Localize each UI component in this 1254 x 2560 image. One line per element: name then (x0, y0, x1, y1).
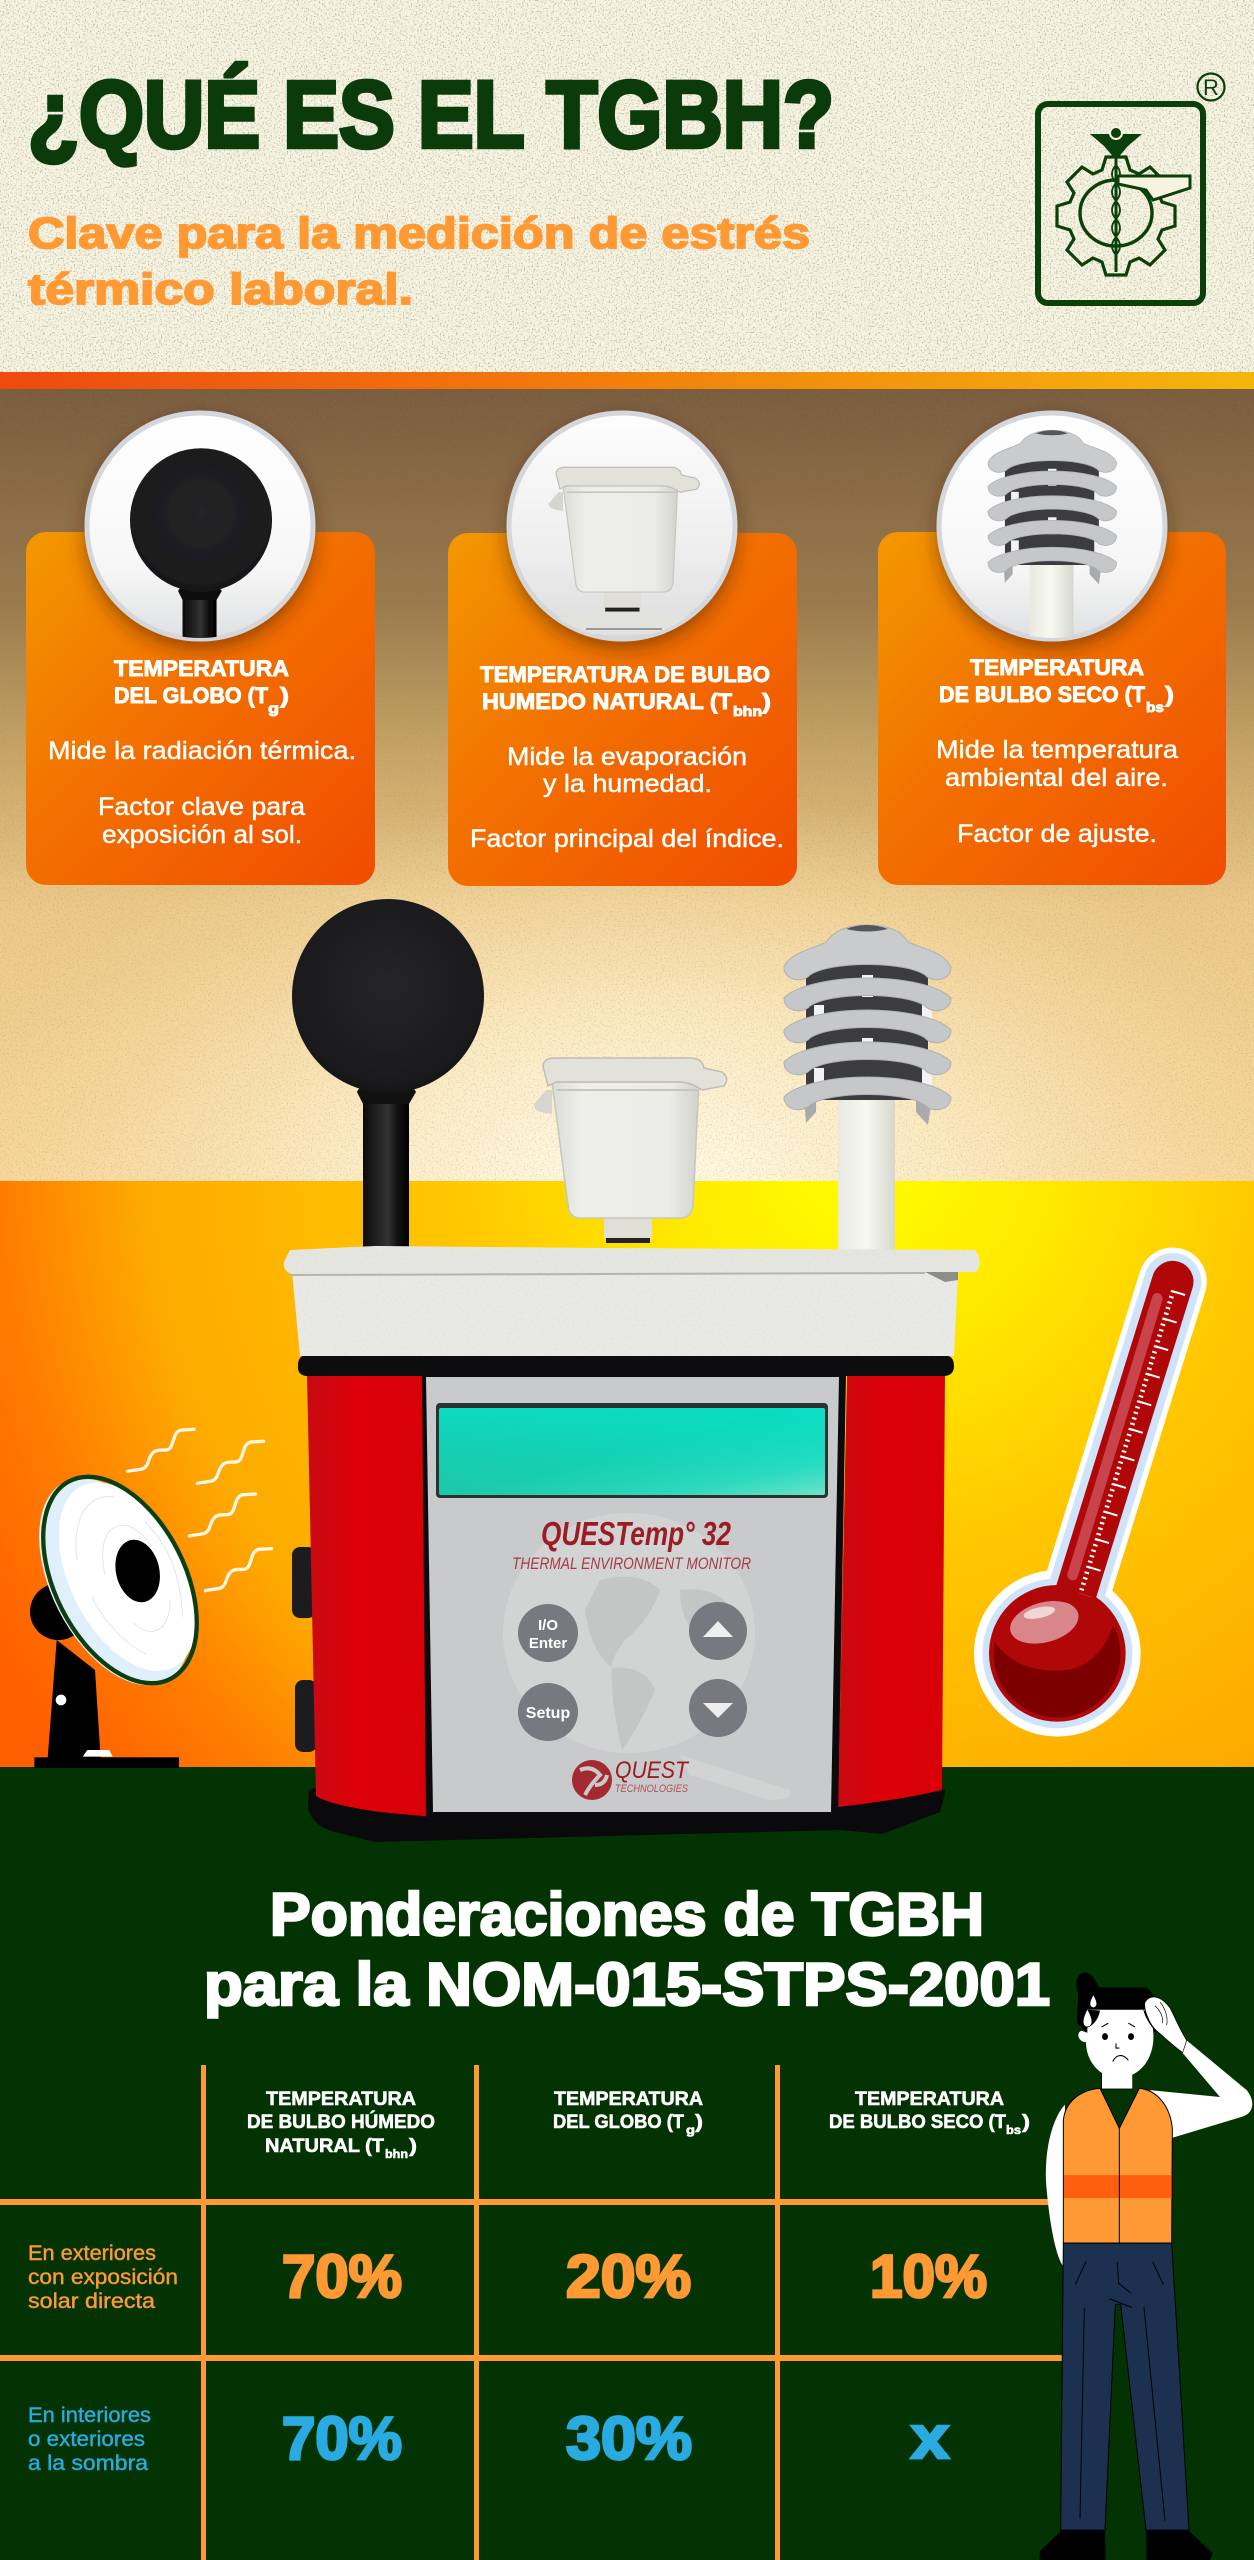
column header: dry bulb: bs (1006, 2123, 1021, 2137)
column header: dry bulb: DE BULBO SECO (T (829, 2112, 1006, 2133)
white housing (284, 1246, 980, 1356)
card body text: Factor clave para (98, 793, 305, 821)
column header: wet bulb: DE BULBO HÚMEDO (247, 2111, 435, 2133)
head (1078, 2010, 1153, 2078)
LCD display (436, 1403, 828, 1498)
hair (1076, 1973, 1158, 2033)
card heading: ) (762, 689, 771, 714)
table: TGBH weights (0, 2065, 1090, 2560)
black band (298, 1355, 954, 1376)
row label: shade: o exteriores (28, 2428, 145, 2451)
card heading: TEMPERATURA DE BULBO (480, 662, 770, 687)
column header: globe: g (686, 2123, 695, 2137)
Quest Technologies logo: QUEST (615, 1757, 690, 1784)
globe thermometer sensor (292, 899, 484, 1255)
row label: outdoors: En exteriores (28, 2242, 156, 2265)
row values: outdoors (282, 2243, 987, 2310)
card heading: bhn (733, 703, 762, 719)
card heading: TEMPERATURA (114, 656, 289, 681)
right arm (1150, 2040, 1252, 2138)
wet bulb sensor (534, 1058, 727, 1243)
panel: card natural wet bulb temperature (448, 413, 797, 886)
Quest Technologies logo (572, 1757, 690, 1800)
column header: dry bulb: TEMPERATURA (855, 2089, 1004, 2110)
card heading (114, 656, 289, 716)
row label: outdoors: con exposición (28, 2266, 178, 2289)
red body (307, 1375, 433, 1817)
row values: shade (282, 2404, 949, 2472)
card body text: Mide la temperatura (936, 736, 1178, 764)
card heading: ) (280, 683, 289, 708)
face (1102, 2023, 1135, 2061)
column header: globe: TEMPERATURA (554, 2089, 703, 2110)
dry bulb sensor (784, 925, 951, 1260)
column header: dry bulb (829, 2089, 1030, 2137)
subtitle (28, 209, 810, 314)
card heading: bs (1146, 699, 1164, 715)
Quest Technologies logo: TECHNOLOGIES (615, 1783, 689, 1795)
column header: wet bulb: bhn (385, 2147, 408, 2161)
icon: wet bulb sensor (509, 413, 735, 639)
card body text: Factor de ajuste. (957, 820, 1157, 848)
side connectors (292, 1547, 317, 1752)
row values: outdoors: 70% (282, 2243, 402, 2310)
card body text (936, 736, 1178, 848)
panel: card globe temperature (26, 413, 375, 885)
panel: heat background (0, 1181, 1254, 1768)
icon: thermometer (974, 1282, 1179, 1737)
card body text: exposición al sol. (102, 821, 302, 849)
left arm (1046, 2105, 1065, 2266)
row values: outdoors: 20% (566, 2243, 691, 2310)
column header: globe: DEL GLOBO (T (553, 2112, 684, 2133)
safety vest (1063, 2088, 1172, 2243)
brand text: THERMAL ENVIRONMENT MONITOR (512, 1554, 751, 1573)
brand text: QUESTemp° 32 (541, 1515, 732, 1552)
sweat drops (1084, 1995, 1096, 2027)
icon: worried worker (1039, 1973, 1252, 2560)
icon: institutional logo (1038, 74, 1224, 303)
icon: institutional logo: R (1203, 75, 1219, 100)
column header: dry bulb: ) (1022, 2112, 1030, 2133)
card body text (470, 743, 784, 853)
panel: sand background (0, 389, 1254, 1181)
keypad buttons: I/O (538, 1617, 558, 1634)
base bumper (308, 1780, 946, 1842)
card body text: Factor principal del índice. (470, 825, 784, 853)
shoes (1039, 2530, 1213, 2560)
card heading: TEMPERATURA (970, 655, 1144, 680)
card body text: ambiental del aire. (945, 764, 1168, 792)
card body text (48, 737, 356, 849)
heading: ponderaciones: para la NOM-015-STPS-2001 (204, 1951, 1050, 2018)
keypad buttons: Setup (526, 1705, 570, 1722)
card body text: Mide la evaporación (507, 743, 747, 771)
column header: wet bulb: TEMPERATURA (266, 2089, 416, 2110)
icon: QUESTemp 32 monitor device (284, 899, 980, 1842)
world map watermark (503, 1513, 791, 1800)
subtitle: Clave para la medición de estrés (28, 209, 810, 258)
icon: radiant heater (8, 1429, 272, 1768)
row values: shade: 30% (566, 2405, 692, 2472)
row label: outdoors: solar directa (28, 2290, 155, 2313)
column header: wet bulb (247, 2089, 435, 2161)
neck (1102, 2073, 1133, 2089)
row label: shade: En interiores (28, 2404, 151, 2427)
title: ¿QUÉ ES EL TGBH? (28, 62, 834, 168)
heading: ponderaciones: Ponderaciones de TGBH (270, 1881, 984, 1948)
panel: header (0, 0, 1254, 372)
row label: shade (28, 2404, 151, 2475)
card body text: Mide la radiación térmica. (48, 737, 356, 765)
hand (1145, 1997, 1187, 2053)
row values: outdoors: 10% (870, 2243, 987, 2310)
card heading: HUMEDO NATURAL (T (482, 689, 733, 714)
column header: globe (553, 2089, 703, 2137)
panel: bottom green background (0, 1767, 1254, 2560)
decorative gradient strip (0, 372, 1254, 389)
column header: globe: ) (695, 2112, 703, 2133)
icon: dry bulb sensor (939, 413, 1165, 688)
panel: card dry bulb temperature (878, 413, 1226, 885)
heading: ponderaciones (204, 1881, 1050, 2018)
trousers (1061, 2243, 1189, 2530)
keypad buttons (518, 1602, 747, 1741)
row label: outdoors (28, 2242, 178, 2313)
row values: shade: x (911, 2404, 949, 2471)
card heading: DEL GLOBO (T (114, 683, 269, 708)
front panel (422, 1375, 846, 1820)
brand text (512, 1515, 751, 1573)
column header: wet bulb: NATURAL (T (265, 2136, 384, 2157)
card body text: y la humedad. (543, 770, 712, 798)
card heading: g (268, 700, 279, 716)
column header: wet bulb: ) (409, 2136, 417, 2157)
row label: shade: a la sombra (28, 2452, 148, 2475)
row values: shade: 70% (282, 2405, 402, 2472)
card heading: DE BULBO SECO (T (939, 682, 1146, 707)
keypad buttons: Enter (529, 1635, 567, 1652)
card heading (939, 655, 1174, 715)
icon: globe sensor (87, 413, 313, 712)
card heading: ) (1165, 682, 1174, 707)
subtitle: térmico laboral. (28, 265, 413, 314)
card heading (480, 662, 771, 719)
